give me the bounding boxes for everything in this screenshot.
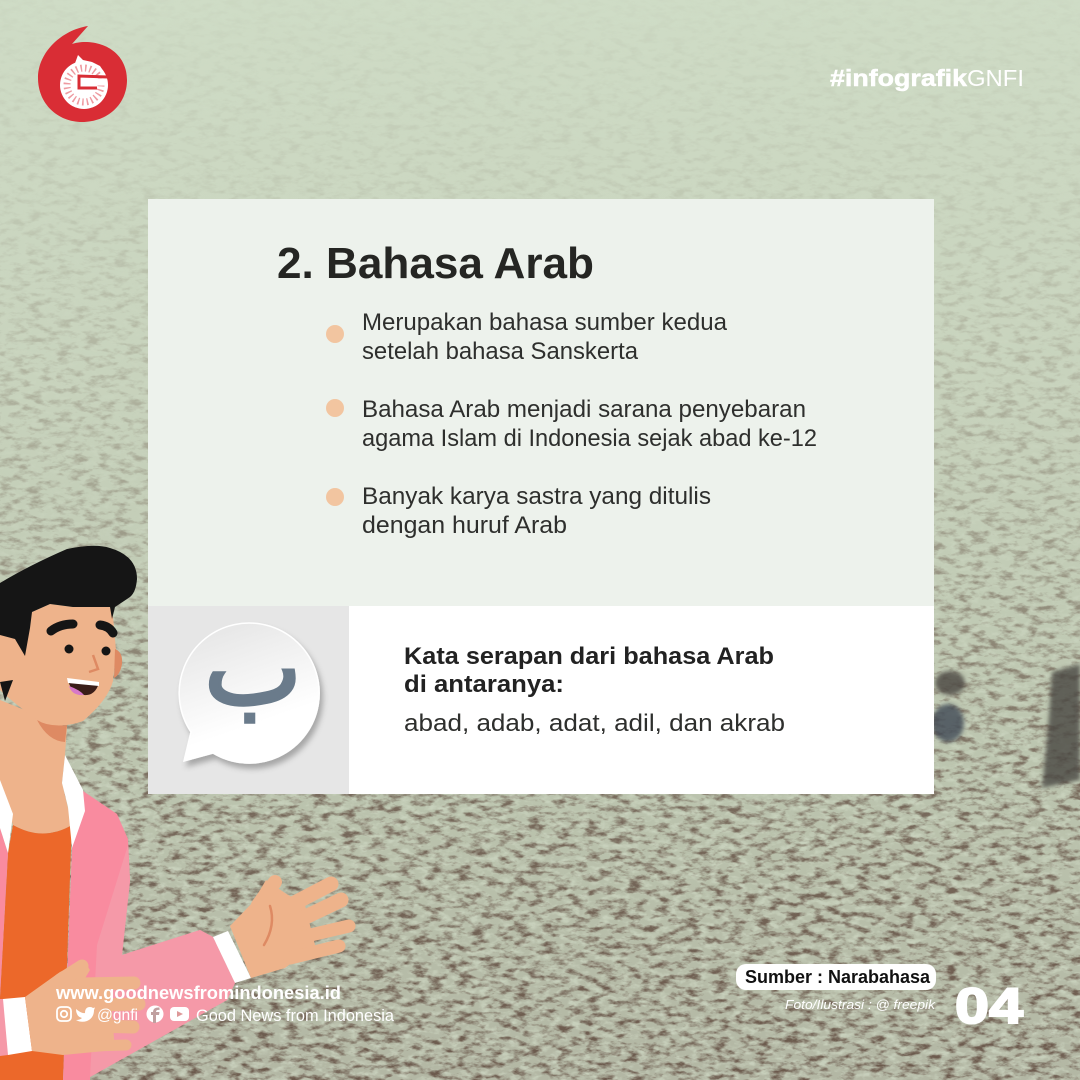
photo credit: Foto/Ilustrasi : @ freepik — [785, 997, 937, 1012]
panel: main content — [148, 199, 934, 606]
bullet 3 — [326, 483, 711, 539]
footer: website and socials: www.goodnewsfromindonesia.id — [55, 983, 341, 1003]
loanwords text: Kata serapan dari bahasa Arab — [404, 643, 774, 670]
hand left — [25, 961, 139, 1055]
loanwords text — [404, 643, 785, 737]
page number: 04 — [955, 978, 1023, 1034]
ear right — [114, 649, 122, 678]
footer: website and socials — [55, 983, 395, 1025]
eyes — [64, 644, 110, 656]
hashtag header: GNFI — [967, 65, 1024, 91]
collar right — [62, 755, 85, 848]
heading: 2. Bahasa Arab — [277, 239, 594, 288]
logo: GNFI red swirl with eagle — [38, 26, 127, 122]
loanwords text: di antaranya: — [404, 671, 564, 698]
bullet 1: setelah bahasa Sanskerta — [362, 338, 639, 365]
orange t-shirt — [0, 825, 72, 1080]
bullet 2 — [326, 396, 817, 452]
hand right — [230, 880, 349, 978]
ear left — [0, 637, 14, 681]
icon: youtube — [170, 1007, 189, 1021]
bullet 2: Bahasa Arab menjadi sarana penyebaran — [362, 396, 806, 423]
bullet 1 — [326, 309, 728, 365]
jacket — [63, 791, 235, 1080]
icon: speech bubble with Arabic letter: ب — [204, 607, 302, 729]
jacket left — [0, 828, 8, 997]
cuff right — [213, 931, 251, 983]
source pill: Sumber : Narabahasa — [745, 967, 931, 987]
loanwords text: abad, adab, adat, adil, dan akrab — [404, 710, 785, 737]
bullet 1: Merupakan bahasa sumber kedua — [362, 309, 728, 336]
face — [0, 604, 116, 725]
eyebrows — [51, 624, 113, 633]
hair — [0, 546, 137, 656]
neck — [0, 700, 72, 834]
icon: instagram — [57, 1007, 71, 1021]
mouth — [67, 678, 99, 695]
icon: speech bubble with Arabic letter — [179, 607, 319, 763]
nose — [89, 655, 98, 672]
bullet 2: agama Islam di Indonesia sejak abad ke-12 — [362, 425, 817, 452]
bullet 3: dengan huruf Arab — [362, 512, 567, 539]
jacket sleeve highlight — [90, 845, 235, 1077]
icon: facebook — [146, 1006, 164, 1023]
icon: twitter — [76, 1007, 95, 1022]
collar left — [0, 780, 13, 853]
character: man gesturing — [0, 546, 349, 1080]
hashtag header: #infografik — [830, 65, 967, 91]
panel: loanwords — [148, 606, 934, 794]
bullet 3: Banyak karya sastra yang ditulis — [362, 483, 711, 510]
social handle: @gnfi — [97, 1007, 138, 1024]
hashtag header — [830, 65, 1024, 91]
neck shadow — [37, 720, 67, 742]
page name: Good News from Indonesia — [196, 1006, 395, 1025]
cuff left — [3, 997, 32, 1055]
